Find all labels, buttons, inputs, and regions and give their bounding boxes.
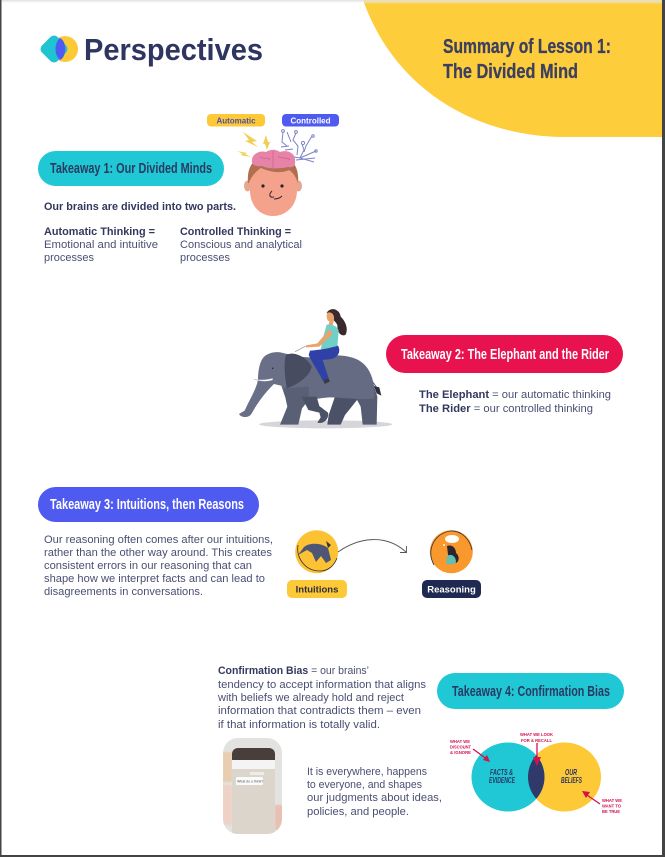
- text: confirmation bias definition: with beliefs we already hold and reject: [217, 692, 404, 704]
- hair: [327, 309, 347, 335]
- label: intuitions: [287, 580, 347, 598]
- label: reasoning: Reasoning: [427, 584, 476, 596]
- icon: intuitions circle: [295, 530, 338, 573]
- arrow: want to be true: WHAT WE: [602, 798, 622, 803]
- illustration: elephant and rider: [239, 309, 392, 428]
- head and trunk: [239, 352, 288, 417]
- title: [443, 36, 611, 83]
- label: reasoning: [422, 580, 481, 598]
- arrow: discount and ignore: [450, 739, 490, 762]
- panel: takeaway 3: [38, 487, 273, 598]
- text: it is everywhere: It is everywhere, happens: [307, 766, 427, 778]
- text: automatic thinking: Automatic Thinking =: [44, 226, 155, 238]
- text: controlled thinking: Controlled Thinking =: [180, 226, 291, 238]
- shirt: [321, 325, 339, 350]
- text: it is everywhere: policies, and people.: [307, 806, 409, 818]
- text: automatic thinking: processes: [44, 252, 94, 264]
- icon: circuit lines: [281, 130, 317, 162]
- text: brains intro: Our brains are divided into two parts.: [44, 201, 236, 213]
- label: intuitions: Intuitions: [296, 584, 338, 596]
- tusk: [254, 378, 273, 381]
- image: phone photo: What do u think?: [237, 780, 263, 784]
- arrow: discount and ignore: DISCOUNT: [450, 744, 471, 750]
- back legs: [327, 392, 358, 425]
- icon: lightning bolts: [237, 132, 270, 157]
- pants: [309, 346, 339, 381]
- label: controlled: [282, 114, 339, 126]
- text: it is everywhere: [307, 766, 442, 818]
- icon: head with brain: [237, 130, 317, 216]
- title: The Divided Mind: [443, 61, 578, 83]
- text: it is everywhere: our judgments about ideas,: [307, 792, 442, 804]
- text: reasoning paragraph: consistent errors in our reasoning that can: [44, 560, 252, 572]
- front legs: [280, 387, 309, 425]
- banner: yellow corner shape: [363, 0, 662, 137]
- brain: [252, 150, 295, 168]
- ear: [285, 354, 312, 388]
- shadow: [259, 420, 392, 428]
- label: controlled: Controlled: [290, 116, 331, 126]
- label: facts and evidence: EVIDENCE: [489, 776, 515, 785]
- heading: takeaway 1: Takeaway 1: Our Divided Minds: [50, 161, 212, 177]
- hair: [248, 160, 298, 183]
- arrow: want to be true: BE TRUE: [602, 809, 620, 814]
- icon: reasoning circle: [430, 530, 473, 573]
- arrow: look for and recall: WHAT WE LOOK: [520, 732, 554, 737]
- reins: [295, 346, 306, 352]
- text: confirmation bias definition: Confirmation Bias = our brains’: [218, 665, 369, 677]
- label: our beliefs: [561, 768, 582, 785]
- arrow: look for and recall: [520, 732, 554, 766]
- heading: takeaway 4: Takeaway 4: Confirmation Bias: [452, 684, 610, 700]
- body: [273, 352, 374, 404]
- text: controlled thinking: processes: [180, 252, 230, 264]
- logo: Perspectives: Perspectives: [84, 33, 263, 67]
- arrow: discount and ignore: & IGNORE: [450, 750, 471, 755]
- panel: takeaway 1: [38, 151, 302, 264]
- text: elephant and rider definitions: The Elephant = our automatic thinking: [419, 389, 611, 401]
- tail: [367, 375, 377, 388]
- arm: [306, 329, 333, 347]
- chart: venn diagram: [450, 732, 622, 814]
- label: our beliefs: BELIEFS: [561, 776, 582, 785]
- text: elephant and rider definitions: [419, 389, 611, 415]
- arrow: look for and recall: FOR & RECALL: [521, 738, 552, 743]
- arrow: intuitions to reasoning: [338, 540, 406, 552]
- heading: takeaway 2: [386, 335, 623, 373]
- text: reasoning paragraph: Our reasoning often comes after our intuitions,: [44, 534, 273, 546]
- arrow: want to be true: [582, 791, 622, 814]
- text: reasoning paragraph: disagreements in conversations.: [44, 586, 203, 598]
- text: confirmation bias definition: information that contradicts them – even: [218, 705, 421, 717]
- text: confirmation bias definition: tendency to accept information that aligns: [218, 679, 427, 691]
- panel: takeaway 4: [217, 665, 624, 818]
- label: facts and evidence: FACTS &: [490, 768, 513, 777]
- heading: takeaway 3: Takeaway 3: Intuitions, then Reasons: [50, 497, 244, 513]
- text: elephant and rider definitions: The Rider = our controlled thinking: [419, 403, 593, 415]
- arrow: want to be true: WANT TO: [602, 804, 621, 808]
- title: Summary of Lesson 1:: [443, 36, 611, 58]
- label: facts and evidence: [489, 768, 515, 785]
- eyes and mouth: [261, 184, 265, 188]
- panel: takeaway 2: [386, 335, 623, 415]
- heading: takeaway 4: [437, 673, 624, 709]
- text: confirmation bias definition: if that information is totally valid.: [218, 719, 380, 731]
- arrow: discount and ignore: WHAT WE: [450, 739, 470, 744]
- text: automatic thinking: [44, 226, 158, 264]
- heading: takeaway 1: [38, 151, 224, 186]
- label: automatic: [207, 114, 265, 126]
- label: our beliefs: OUR: [565, 768, 577, 777]
- text: controlled thinking: [180, 226, 302, 264]
- face: [327, 312, 334, 325]
- ears: [244, 180, 251, 192]
- text: reasoning paragraph: shape how we interpret facts and can lead to: [44, 573, 265, 585]
- text: confirmation bias definition: [217, 665, 427, 731]
- label: automatic: Automatic: [216, 116, 256, 126]
- text: reasoning paragraph: [44, 534, 273, 598]
- text: reasoning paragraph: rather than the other way around. This creates: [44, 547, 272, 559]
- text: controlled thinking: Conscious and analytical: [180, 239, 302, 251]
- text: it is everywhere: to everyone, and shapes: [307, 779, 422, 791]
- text: automatic thinking: Emotional and intuitive: [44, 239, 158, 251]
- image: phone photo: [222, 738, 283, 838]
- heading: takeaway 3: [38, 487, 259, 522]
- face: [250, 164, 297, 216]
